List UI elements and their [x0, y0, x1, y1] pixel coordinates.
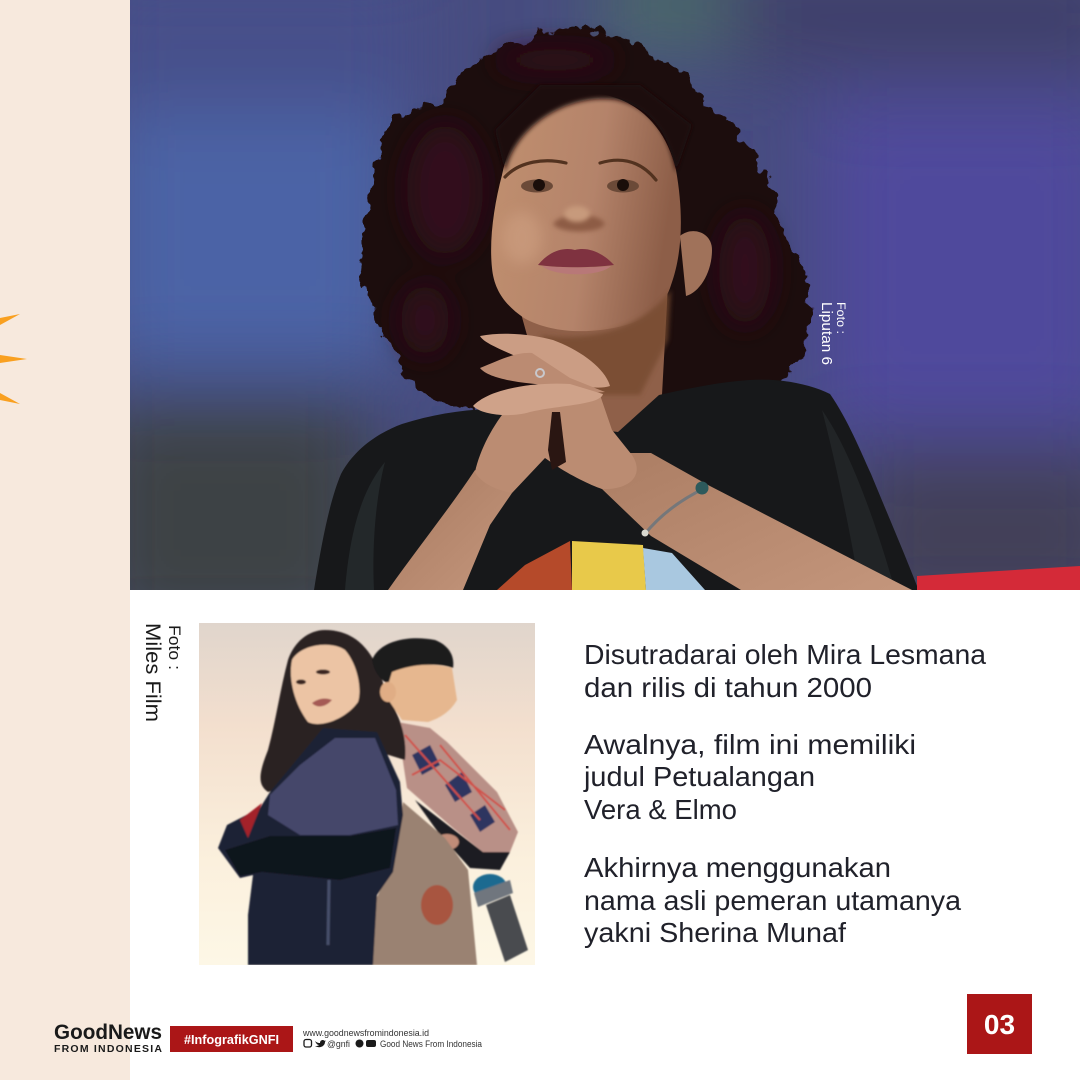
icon: instagram: [304, 1040, 312, 1047]
logo: GoodNews From Indonesia: [54, 1021, 162, 1055]
backpack: [373, 802, 477, 965]
fact: director and release: Disutradarai oleh Mira Lesmana: [584, 639, 986, 670]
logo: GoodNews From Indonesia: FROM INDONESIA: [54, 1043, 162, 1055]
fact: final title: [584, 852, 961, 948]
ear: [680, 231, 712, 296]
clasped hands: [388, 334, 912, 590]
girl jacket: [218, 728, 403, 965]
icon: youtube: [366, 1040, 376, 1047]
photo: Mira Lesmana portrait: [130, 0, 1080, 590]
fact: final title: nama asli pemeran utamanya: [584, 885, 961, 916]
photo credit: Liputan 6: Liputan 6: [818, 302, 834, 365]
fact: director and release: [584, 639, 986, 703]
jacket folded arm shadow: [225, 828, 396, 880]
photo credit: Miles Film: Foto :: [165, 625, 184, 670]
fact: original title: judul Petualangan: [583, 761, 815, 792]
website and social links: www.goodnewsfromindonesia.id: [302, 1028, 429, 1039]
photo: Sherina and Sadam film still: [199, 623, 535, 965]
hashtag label: #InfografikGNFI: [184, 1033, 279, 1047]
page number badge: 03: [984, 1009, 1015, 1040]
photo credit: Miles Film: [141, 623, 184, 722]
fact: director and release: dan rilis di tahun 2000: [584, 672, 872, 703]
neck: [522, 294, 668, 432]
fact: original title: [583, 729, 916, 825]
water bottle: [473, 874, 528, 962]
ring: [536, 369, 544, 377]
panel: left cream sidebar: [0, 0, 130, 1080]
girl face: [291, 645, 359, 724]
eyebrows: [505, 160, 656, 180]
page number badge: [967, 994, 1032, 1054]
hair fringe: [503, 93, 676, 172]
girl hair: [260, 630, 405, 792]
fact: final title: Akhirnya menggunakan: [584, 852, 891, 883]
boy shirt: [397, 722, 518, 852]
photo credit: Liputan 6: [818, 302, 848, 365]
website and social links: Good News From Indonesia: [380, 1039, 482, 1049]
website and social links: [302, 1028, 482, 1049]
icon: orange sun rays: [0, 314, 27, 404]
fact: final title: yakni Sherina Munaf: [584, 917, 846, 948]
boy hair: [372, 638, 453, 685]
boy face: [385, 665, 457, 722]
photo credit: Miles Film: Miles Film: [141, 623, 164, 722]
lips: [538, 249, 614, 274]
fact: original title: Awalnya, film ini memiliki: [584, 729, 916, 760]
t-shirt: [314, 380, 917, 590]
icon: twitter: [315, 1040, 326, 1047]
text block: film facts: [583, 639, 986, 948]
eyes: [521, 179, 639, 192]
photo background colour fields: [130, 0, 1080, 590]
hair: [360, 28, 812, 412]
bracelet: [642, 482, 708, 536]
nose: [553, 215, 605, 232]
icon: facebook: [356, 1040, 364, 1048]
face: [491, 93, 681, 331]
website and social links: @gnfi: [327, 1039, 350, 1049]
dark gap under arm: [415, 800, 510, 870]
logo: GoodNews From Indonesia: GoodNews: [54, 1021, 162, 1044]
fact: original title: Vera & Elmo: [584, 794, 737, 825]
red sofa: [917, 566, 1080, 590]
hashtag label: [170, 1026, 293, 1052]
shirt graphic: [497, 541, 705, 590]
zipper: [328, 880, 329, 945]
photo credit: Liputan 6: Foto :: [834, 302, 848, 334]
